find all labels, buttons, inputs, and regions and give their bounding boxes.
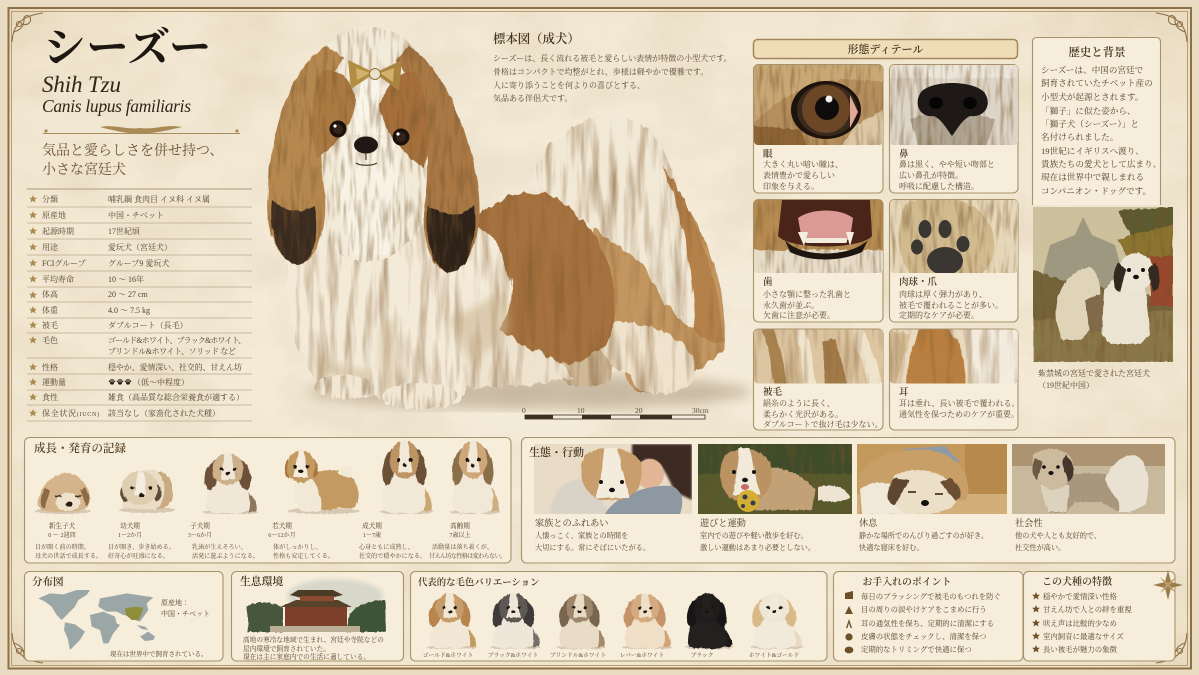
detail card: teeth: 欠歯に注意が必要。	[763, 310, 835, 320]
scale bar: 10	[577, 406, 585, 415]
face	[311, 70, 429, 255]
species data table: 平均寿命	[42, 274, 74, 284]
growth stage captions: 若犬期	[272, 521, 292, 530]
colour variation labels: レバー&ホワイト	[620, 652, 664, 659]
breed features panel: 穏やかで愛情深い性格	[1043, 592, 1118, 601]
scale bar	[522, 406, 709, 419]
growth stage captions: 3～6か月	[188, 531, 212, 539]
growth stage captions: 1～7歳	[363, 531, 381, 539]
detail card: eye: 表情豊かで愛らしい	[763, 170, 835, 180]
head	[294, 27, 445, 262]
specimen description: 骨格はコンパクトで均整がとれ、歩様は軽やかで優雅です。	[493, 66, 708, 76]
history panel: 飼育されていたチベット産の	[1041, 77, 1153, 88]
brindle and white dog	[557, 593, 606, 649]
species data table: 原産地	[42, 210, 66, 220]
care tips panel: 目の周りの涙やけケアをこまめに行う	[861, 605, 987, 614]
species data table: 該当なし（家畜化された犬種）	[108, 408, 220, 418]
black and white dog	[490, 593, 541, 649]
title: シーズー	[43, 26, 211, 72]
care tips panel: お手入れのポイント	[863, 575, 951, 588]
species data table: 分類	[42, 194, 59, 204]
history panel	[1032, 38, 1161, 205]
history panel: 「獅子」に似た姿から、	[1041, 105, 1136, 116]
growth stage captions: 1～2か月	[118, 531, 142, 539]
species data table: ゴールド&ホワイト、ブラック&ホワイト、	[108, 336, 246, 345]
detail card: eye: 眼	[763, 149, 773, 160]
growth stage captions: 成犬期	[362, 521, 382, 530]
growth panel: 体がしっかりし、	[273, 543, 322, 551]
distribution map panel: 中国・チベット	[161, 609, 210, 618]
colour variation labels: ブラック	[690, 651, 714, 659]
world map	[38, 590, 155, 650]
species data table: 穏やか、愛情深い、社交的、甘えん坊	[108, 362, 242, 372]
scale bar: 30cm	[692, 406, 709, 415]
scale bar: 20	[635, 406, 643, 415]
white and gold dog	[750, 593, 803, 649]
ecology captions	[535, 517, 1101, 552]
english name: Shih Tzu	[42, 72, 121, 97]
colour variation panel: 代表的な毛色バリエーション	[418, 576, 539, 588]
growth panel: 乳歯が生えそろい、	[192, 543, 247, 551]
species data table: 用途	[42, 242, 58, 252]
detail card: paw: 肉球・爪	[899, 276, 938, 288]
species data table: ダブルコート（長毛）	[108, 321, 188, 330]
breed features panel: 室内飼育に最適なサイズ	[1043, 632, 1124, 641]
detail card: paw: 被毛で覆われることが多い。	[899, 300, 1003, 310]
colour variation labels: ゴールド&ホワイト	[423, 652, 473, 659]
species data table: 体高	[42, 289, 58, 299]
detail section header: 形態ディテール	[848, 42, 923, 56]
tagline	[42, 142, 223, 178]
detail card: eye: 印象を与える。	[763, 181, 819, 191]
species data table: 体重	[42, 305, 58, 315]
species data table: FCIグループ	[42, 259, 86, 268]
ecology captions: 社会性	[1015, 517, 1043, 528]
care tips panel: 毎日のブラッシングで被毛のもつれを防ぐ	[861, 592, 1001, 601]
photo: play	[698, 444, 852, 514]
ecology heading: 生態・行動	[529, 445, 584, 459]
colour variation panel	[410, 572, 827, 661]
species data table: 哺乳綱 食肉目 イヌ科 イヌ属	[108, 194, 210, 204]
species data table: 4.0 ～ 7.5 kg	[108, 306, 150, 315]
ecology captions: 家族とのふれあい	[535, 517, 608, 528]
detail card: teeth: 永久歯が並ぶ。	[763, 300, 819, 310]
distribution map panel: 原産地：	[161, 598, 189, 607]
detail card: paw	[885, 195, 1025, 322]
history panel: 小型犬が起源とされます。	[1041, 91, 1143, 102]
photo: social	[1012, 444, 1165, 514]
ecology captions: 遊びと運動	[700, 517, 746, 528]
scientific name: Canis lupus familiaris	[42, 96, 191, 116]
habitat panel: 生息環境	[240, 574, 283, 588]
species data table: ブリンドル&ホワイト、ソリッド など	[108, 347, 236, 356]
detail card: nose: 鼻は黒く、やや短い吻部と	[899, 159, 995, 169]
main dog illustration	[268, 27, 752, 409]
growth panel: 社交的で穏やかになる。	[359, 552, 426, 560]
growth stage captions: 新生子犬	[49, 521, 76, 530]
painting caption: 紫禁城の宮廷で愛された宮廷犬	[1038, 368, 1150, 378]
ears	[268, 46, 479, 273]
corner flourish top right	[1156, 13, 1187, 42]
species data table	[27, 189, 252, 421]
species data table: 食性	[42, 392, 58, 402]
growth stage captions: 7歳以上	[449, 531, 471, 539]
infant puppy	[119, 470, 175, 513]
detail card: ear: 耳は垂れ、長い被毛で覆われる。	[899, 398, 1019, 408]
species data table: 中国・チベット	[108, 210, 164, 220]
puppy	[202, 453, 258, 514]
ornament divider	[43, 126, 240, 134]
specimen description	[493, 53, 732, 103]
history panel: 貴族たちの愛犬として広まり、	[1041, 158, 1161, 169]
detail card: coat: 柔らかく光沢がある。	[763, 409, 843, 419]
detail card: ear: 通気性を保つためのケアが重要。	[899, 409, 1019, 419]
species data table: （低～中程度）	[133, 377, 189, 387]
history panel: 名付けられました。	[1041, 131, 1118, 142]
species data table: 性格	[42, 362, 58, 372]
painting caption: （19世紀中国）	[1038, 380, 1094, 390]
ecology captions: 他の犬や人とも友好的で、	[1015, 531, 1101, 540]
species data table: グループ9 愛玩犬	[108, 258, 169, 268]
habitat panel: 屋内環境で飼育されていた。	[243, 644, 330, 653]
species data table: 愛玩犬（宮廷犬）	[108, 242, 172, 252]
care tips panel	[834, 572, 1023, 661]
painting caption	[1038, 368, 1150, 390]
growth stage captions: 幼犬期	[120, 521, 140, 530]
tail and hindquarter	[526, 114, 726, 393]
colour variation labels: ホワイト&ゴールド	[749, 652, 799, 659]
ecology captions: 休息	[859, 517, 878, 528]
newborn puppy	[35, 473, 91, 514]
care icons	[845, 591, 853, 653]
growth panel: 性格も安定してくる。	[273, 552, 334, 560]
history panel: 19世紀にイギリスへ渡り、	[1041, 145, 1144, 156]
colour variation labels: ブラック&ホワイト	[488, 651, 538, 659]
breed features panel: この犬種の特徴	[1042, 575, 1112, 588]
detail card: teeth: 歯	[763, 276, 773, 288]
eyes and nose	[330, 120, 410, 165]
detail section header	[754, 40, 1018, 58]
specimen heading: 標本図（成犬）	[493, 31, 580, 46]
chest and front legs	[284, 210, 511, 409]
growth panel: 心身ともに成熟し、	[359, 543, 414, 551]
ecology captions: 静かな場所でのんびり過ごすのが好き。	[859, 531, 988, 540]
ecology captions: 室内での遊びや軽い散歩を好む。	[700, 531, 808, 540]
growth panel: 目が開き、歩き始める。	[108, 543, 175, 551]
growth stage captions: 0 ～ 2週間	[48, 531, 76, 539]
detail card: paw: 定期的なケアが必要。	[899, 310, 979, 320]
species data table: 毛色	[42, 335, 58, 345]
history panel: 歴史と背景	[1069, 45, 1126, 59]
history panel: 現在は世界中で親しまれる	[1041, 171, 1144, 182]
compass rose	[1153, 570, 1183, 600]
species data table: 運動量	[42, 377, 66, 387]
breed features panel: 甘えん坊で人との絆を重視	[1043, 605, 1132, 614]
tagline: 小さな宮廷犬	[42, 161, 126, 178]
ecology captions: 社交性が高い。	[1015, 543, 1065, 552]
feature icons	[1032, 592, 1040, 652]
habitat panel: 高地の寒冷な地域で生まれ、宮廷や寺院などの	[243, 635, 384, 644]
history panel: コンパニオン・ドッグです。	[1041, 186, 1151, 196]
growth panel: 母犬の世話で成長する。	[35, 552, 102, 560]
ecology panel	[522, 438, 1175, 563]
scale bar: 0	[522, 406, 526, 415]
corner flourish bottom right	[1156, 633, 1187, 663]
detail card: ear	[888, 328, 1019, 430]
specimen description: シーズーは、長く流れる被毛と愛らしい表情が特徴の小型犬です。	[493, 53, 732, 63]
distribution map panel: 現在は世界中で飼育されている。	[110, 649, 208, 658]
breed features panel	[1024, 572, 1175, 661]
species data table: 雑食（高品質な総合栄養食が適する）	[108, 392, 244, 402]
hair bow	[348, 60, 402, 91]
palace courtyard painting	[1033, 207, 1173, 362]
growth panel: 活動量は落ち着くが、	[432, 543, 493, 551]
care tips panel: 皮膚の状態をチェックし、清潔を保つ	[861, 632, 986, 641]
detail card: coat: 被毛	[763, 386, 782, 398]
detail card: nose: 鼻	[899, 148, 909, 160]
species data table: 被毛	[42, 320, 58, 330]
colour variation labels: ブリンドル&ホワイト	[550, 651, 606, 659]
detail card: nose	[885, 60, 1025, 193]
species data table: 20 ～ 27 cm	[108, 290, 149, 299]
detail card: teeth: 小さな顎に整った乳歯と	[763, 289, 851, 299]
specimen description: 気品ある伴侶犬です。	[493, 93, 572, 103]
breed features panel: 吠え声は比較的少なめ	[1043, 619, 1117, 628]
ecology captions: 大切にする。常にそばにいたがる。	[535, 543, 650, 552]
species data table: 17世紀頃	[108, 226, 140, 236]
detail card: coat	[752, 328, 884, 430]
detail card: teeth	[752, 199, 884, 322]
species data table: 起源時期	[42, 226, 74, 236]
growth panel: 活発に遊ぶようになる。	[192, 552, 259, 560]
black dog	[685, 593, 733, 649]
detail card: paw: 肉球は厚く弾力があり、	[899, 289, 987, 299]
detail card: nose: 広い鼻孔が特徴。	[899, 170, 963, 180]
adult dog	[380, 441, 433, 515]
care tips panel: 耳の通気性を保ち、定期的に清潔にする	[861, 619, 994, 628]
care tips panel: 定期的なトリミングで快適に保つ	[861, 645, 972, 654]
palace picture	[247, 579, 386, 632]
growth stage captions: 6～12か月	[268, 531, 296, 539]
history panel: シーズーは、中国の宮廷で	[1041, 64, 1143, 75]
corner flourish bottom left	[12, 633, 43, 663]
senior dog	[450, 441, 500, 515]
specimen description: 人に寄り添うことを何よりの喜びとする、	[493, 80, 645, 90]
detail card: eye	[752, 64, 884, 194]
photo: family	[534, 444, 692, 514]
tagline: 気品と愛らしさを併せ持つ、	[42, 142, 223, 159]
young dog	[284, 450, 359, 514]
liver and white dog	[622, 593, 672, 649]
corner flourish top left	[12, 13, 43, 42]
ecology captions: 激しい運動はあまり必要としない。	[700, 543, 815, 552]
breed features panel: 長い被毛が魅力の象徴	[1043, 645, 1118, 654]
detail card: eye: 大きく丸い暗い瞳は、	[763, 159, 843, 169]
growth panel	[24, 438, 511, 563]
gold and white dog	[427, 593, 477, 649]
growth stage captions: 子犬期	[190, 521, 210, 530]
detail card: coat: 絹糸のように長く、	[763, 398, 835, 408]
photo: rest	[857, 444, 1007, 514]
species data table: 保全状況(IUCN)	[42, 408, 99, 418]
growth panel: 好奇心が旺盛になる。	[108, 552, 169, 560]
ecology captions: 人懐っこく、家族との時間を	[535, 531, 628, 540]
detail card: nose: 呼吸に配慮した構造。	[899, 181, 979, 191]
growth stage captions: 高齢期	[450, 521, 470, 530]
species data table: 10 ～ 16年	[108, 274, 144, 284]
detail card: coat: ダブルコートで抜け毛は少ない。	[763, 419, 883, 429]
growth panel: 成長・発育の記録	[34, 441, 126, 455]
history panel: 「獅子犬（シーズー）」と	[1041, 118, 1139, 129]
growth panel: 目が開く前の時期、	[35, 543, 90, 551]
ecology captions: 快適な寝床を好む。	[859, 543, 924, 552]
habitat panel	[232, 572, 404, 661]
body saddle	[430, 192, 615, 388]
distribution map panel: 分布図	[32, 575, 64, 588]
growth stage captions	[48, 521, 471, 539]
colour variation labels	[423, 651, 799, 659]
habitat panel: 現在は主に家庭内での生活に適している。	[243, 652, 370, 661]
detail card: ear: 耳	[899, 386, 909, 398]
growth panel: 甘えん坊な性格は変わらない。	[429, 552, 506, 560]
distribution map panel	[24, 572, 223, 661]
